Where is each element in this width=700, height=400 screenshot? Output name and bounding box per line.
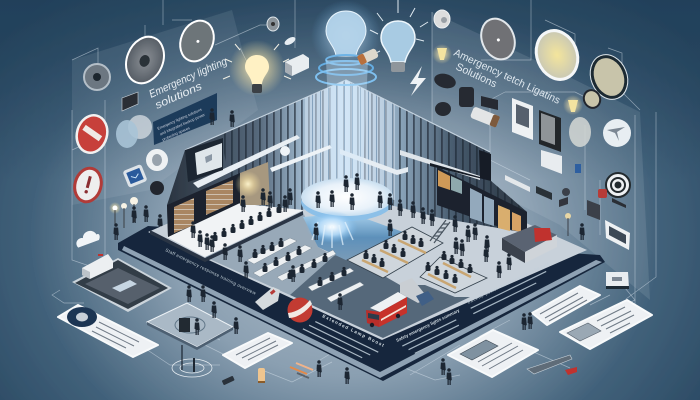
lower right storefront frame [437, 167, 527, 233]
warm windows right [498, 205, 521, 232]
fire truck [366, 292, 407, 327]
icon: lamp posts [109, 197, 138, 228]
card: small upper card [532, 286, 600, 325]
text block: dark label: Emergency lighting solutions [157, 108, 203, 131]
icon: gray ring disc [84, 64, 110, 90]
text block: dark label: and integrated backup power [159, 113, 206, 136]
icon: cream lit disc [529, 24, 585, 86]
text block: lower band label [303, 308, 385, 364]
icon: small spotlight [283, 35, 297, 47]
right slab one [340, 149, 408, 175]
device plate: tablet [72, 258, 172, 312]
left glazing [220, 80, 346, 210]
inner band stripe [122, 246, 602, 378]
heading: right: Amergency tetch Ligatins [452, 47, 562, 107]
right seating group two [420, 251, 487, 293]
lower left balcony slab [270, 145, 332, 172]
staircase [430, 220, 450, 243]
icon: white oval fixture [142, 145, 172, 175]
platform base: outer dark band [118, 226, 605, 381]
parked vehicles [400, 278, 434, 306]
icon: control panel dark [539, 110, 561, 152]
floor: dark zone around fire truck [290, 255, 470, 338]
balcony orb [280, 146, 290, 156]
icon: orange ground lights [290, 363, 313, 378]
card: large bottom card [448, 330, 538, 377]
icon: white wall screen [605, 220, 630, 250]
central mullions [305, 80, 395, 205]
warm glow [235, 171, 261, 197]
light column [326, 60, 368, 195]
upper balcony slab [193, 135, 300, 188]
icon: battery small [357, 48, 379, 65]
icon: white box light [285, 54, 309, 76]
icon: small dark box [122, 92, 138, 111]
teal window [451, 176, 462, 194]
small device [222, 376, 235, 385]
people: left lawn [114, 108, 235, 240]
icon: small red marker [565, 367, 577, 375]
roof edge [185, 80, 490, 152]
floor [148, 145, 587, 340]
people: lower right [440, 312, 533, 385]
glass platform [147, 303, 233, 350]
icon: rail device [527, 355, 572, 374]
people: on glass platform [186, 285, 239, 335]
text block: left band label: Staff emergency response training overview [165, 247, 257, 296]
central glass atrium [305, 80, 395, 205]
icons: dark fixtures [433, 71, 498, 116]
warm storefront left one [174, 198, 194, 233]
icon: control panel white [512, 98, 533, 140]
icon: dark disc [150, 181, 164, 195]
floor: white atrium edge [150, 211, 303, 262]
icon: right lamp [565, 213, 571, 236]
building [167, 80, 527, 237]
people: central floor [268, 173, 585, 278]
icon: dark ringed disc [584, 49, 634, 105]
icon: blue tablet [122, 164, 148, 188]
floor: slate conference area [205, 212, 350, 295]
icon: orange beacon [258, 368, 265, 383]
icon: small warm bulb [432, 44, 452, 64]
card: left pill card [58, 305, 158, 357]
icon: gray disc right [475, 14, 521, 64]
screen frame [185, 138, 223, 182]
right upper floor slab [400, 150, 480, 180]
floor circle with stand [172, 345, 212, 377]
tables: left conference [222, 238, 364, 310]
blue light pool [303, 213, 403, 262]
icon: translucent spheres [116, 115, 152, 148]
icon: small ring disc right [581, 87, 603, 111]
icon: blue tag [575, 164, 581, 173]
text block: right band labels: Safety emergency lights summary [395, 307, 461, 343]
device in band [255, 287, 280, 310]
icon: small bulb right [563, 95, 583, 115]
text block: lower band label: Extended Lamp Boost [322, 313, 385, 348]
heading: right: Solutions [454, 61, 499, 90]
icon: translucent egg [569, 117, 591, 147]
icon: ambulance on plate [82, 254, 113, 279]
floor: white atrium [167, 190, 303, 257]
card: left bottom text card [223, 333, 292, 368]
icon: white fan disc [603, 119, 631, 147]
kiosk desk [502, 225, 557, 263]
icon: target rings [606, 173, 630, 197]
warm window one [438, 170, 450, 190]
text block: right band labels: backup power maintenance schedule [467, 260, 550, 305]
icon: warning sign [71, 165, 105, 205]
warm lit hall [240, 162, 270, 205]
light rays on pool [312, 222, 353, 248]
icon: small devices right [505, 175, 626, 220]
left facade [167, 80, 346, 237]
seating row on atrium [190, 188, 293, 252]
icon: dark recessed disc [119, 31, 171, 89]
right upper frame [430, 150, 491, 181]
icon: white battery [470, 106, 500, 128]
text block: dark label: protecting spaces [162, 126, 191, 142]
icon: red prohibition sign [73, 112, 111, 156]
right seating group one [347, 227, 443, 278]
round light platform [301, 178, 393, 243]
right facade [346, 80, 527, 233]
icon: lit bulb [223, 40, 291, 96]
icon: outline bulb [370, 0, 428, 72]
icon: red and white ball [288, 298, 312, 322]
card: right card [560, 300, 652, 349]
panel: right translucent board [432, 12, 650, 300]
icon: small white box [606, 272, 629, 289]
icon: smooth gray disc [174, 16, 220, 66]
heading: left: solutions [153, 80, 204, 112]
right glazing [346, 80, 527, 233]
text block: right band labels [394, 260, 559, 358]
glass door panels [470, 188, 494, 226]
heading: left: Emergency lighting [147, 55, 230, 101]
warm storefront left two [206, 180, 233, 215]
icon: lightning [410, 66, 426, 96]
icon: small wall disc [267, 17, 279, 31]
icon: top wall disc right [434, 10, 450, 28]
icon: white box panel [541, 150, 562, 174]
person: lower pair [316, 360, 350, 384]
icon: cloud [74, 229, 101, 248]
bulb: central glass light [311, 0, 381, 85]
text block: dark label [153, 93, 217, 145]
lower left wall [167, 173, 240, 237]
panel: left translucent board [72, 10, 258, 205]
icon: red tag [598, 189, 607, 198]
